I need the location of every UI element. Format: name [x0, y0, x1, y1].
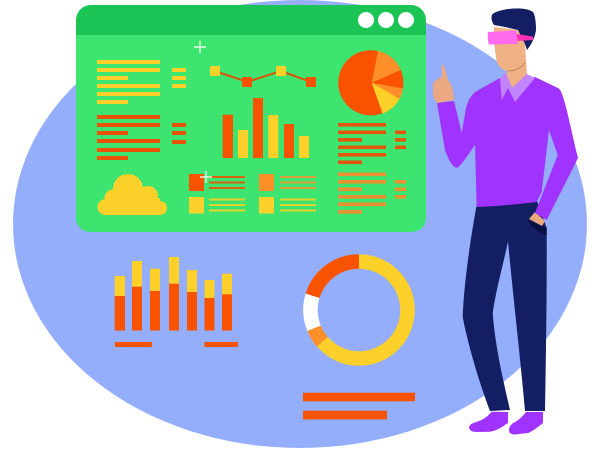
headset strap	[516, 34, 533, 41]
legend: second yellow item	[259, 197, 316, 214]
headset visor	[488, 30, 518, 44]
text lines: right orange block	[338, 172, 406, 214]
collar	[500, 73, 535, 102]
text lines: red block	[97, 115, 186, 160]
panel body	[76, 30, 426, 232]
line chart	[210, 66, 316, 87]
shoes	[469, 412, 543, 434]
donut chart	[310, 262, 408, 358]
jaw shadow	[507, 63, 525, 71]
stacked bar chart	[115, 257, 238, 347]
chart caption bars	[115, 342, 238, 347]
donut caption bars	[303, 393, 415, 419]
sweater	[437, 77, 578, 220]
raised hand	[433, 64, 454, 103]
hand in pocket	[529, 212, 545, 226]
figure: man with VR headset	[433, 8, 578, 434]
legend: yellow item	[189, 197, 245, 214]
window header bar	[76, 5, 426, 35]
icon: cloud	[98, 174, 167, 215]
legend: orange item	[259, 174, 316, 191]
text lines: yellow block	[97, 60, 186, 104]
bar chart	[223, 98, 309, 158]
hair	[491, 8, 536, 50]
legend: red item	[189, 174, 245, 191]
sparkle: lower	[200, 171, 212, 183]
panel: dashboard window	[76, 5, 426, 232]
pie chart	[338, 50, 403, 115]
window control dots	[358, 12, 414, 28]
neck and face	[494, 27, 527, 88]
pocket	[528, 220, 547, 235]
text lines: right red block	[338, 123, 406, 164]
trousers	[463, 201, 547, 411]
sparkle: top	[194, 41, 206, 53]
